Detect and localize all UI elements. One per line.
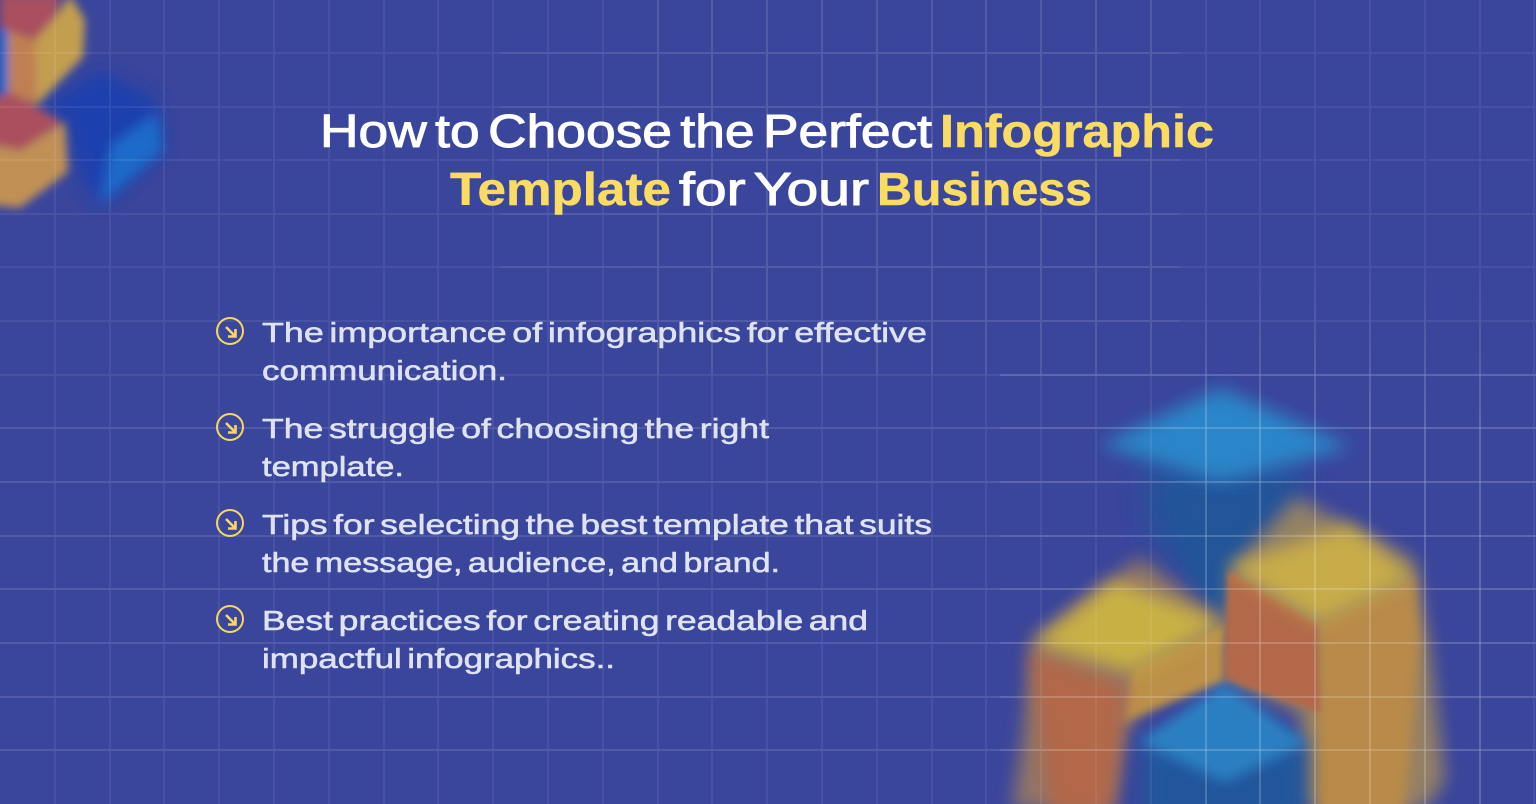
title: Infographic (940, 105, 1214, 157)
cubes: bottom-right blurred cluster (1012, 388, 1445, 804)
bullet 4: Best practices for creating readable and (262, 605, 868, 636)
bullet 1: communication. (262, 355, 507, 386)
icon: arrow circle 4 (217, 606, 243, 632)
icon: arrow circle 1 (217, 318, 243, 344)
bullet 1: The importance of infographics for effective (262, 317, 927, 348)
title: How to Choose the Perfect (320, 105, 932, 157)
bullet 3: the message, audience, and brand. (262, 547, 780, 578)
bullet 4 (217, 605, 868, 674)
bullet 3 (217, 509, 932, 578)
bullet 3: Tips for selecting the best template that suits (262, 509, 932, 540)
title (320, 105, 1214, 215)
title: for Your (679, 163, 869, 215)
icon: arrow circle 2 (217, 414, 243, 440)
bullet 2: The struggle of choosing the right (262, 413, 769, 444)
icon: arrow circle 3 (217, 510, 243, 536)
bullet list (217, 317, 932, 674)
cubes: top-left blurred cluster (0, 0, 163, 208)
bullet 2: template. (262, 451, 404, 482)
bullet 1 (217, 317, 927, 386)
title: Business (877, 163, 1092, 215)
title: Template (450, 163, 671, 215)
bullet 4: impactful infographics.. (262, 643, 615, 674)
bullet 2 (217, 413, 769, 482)
